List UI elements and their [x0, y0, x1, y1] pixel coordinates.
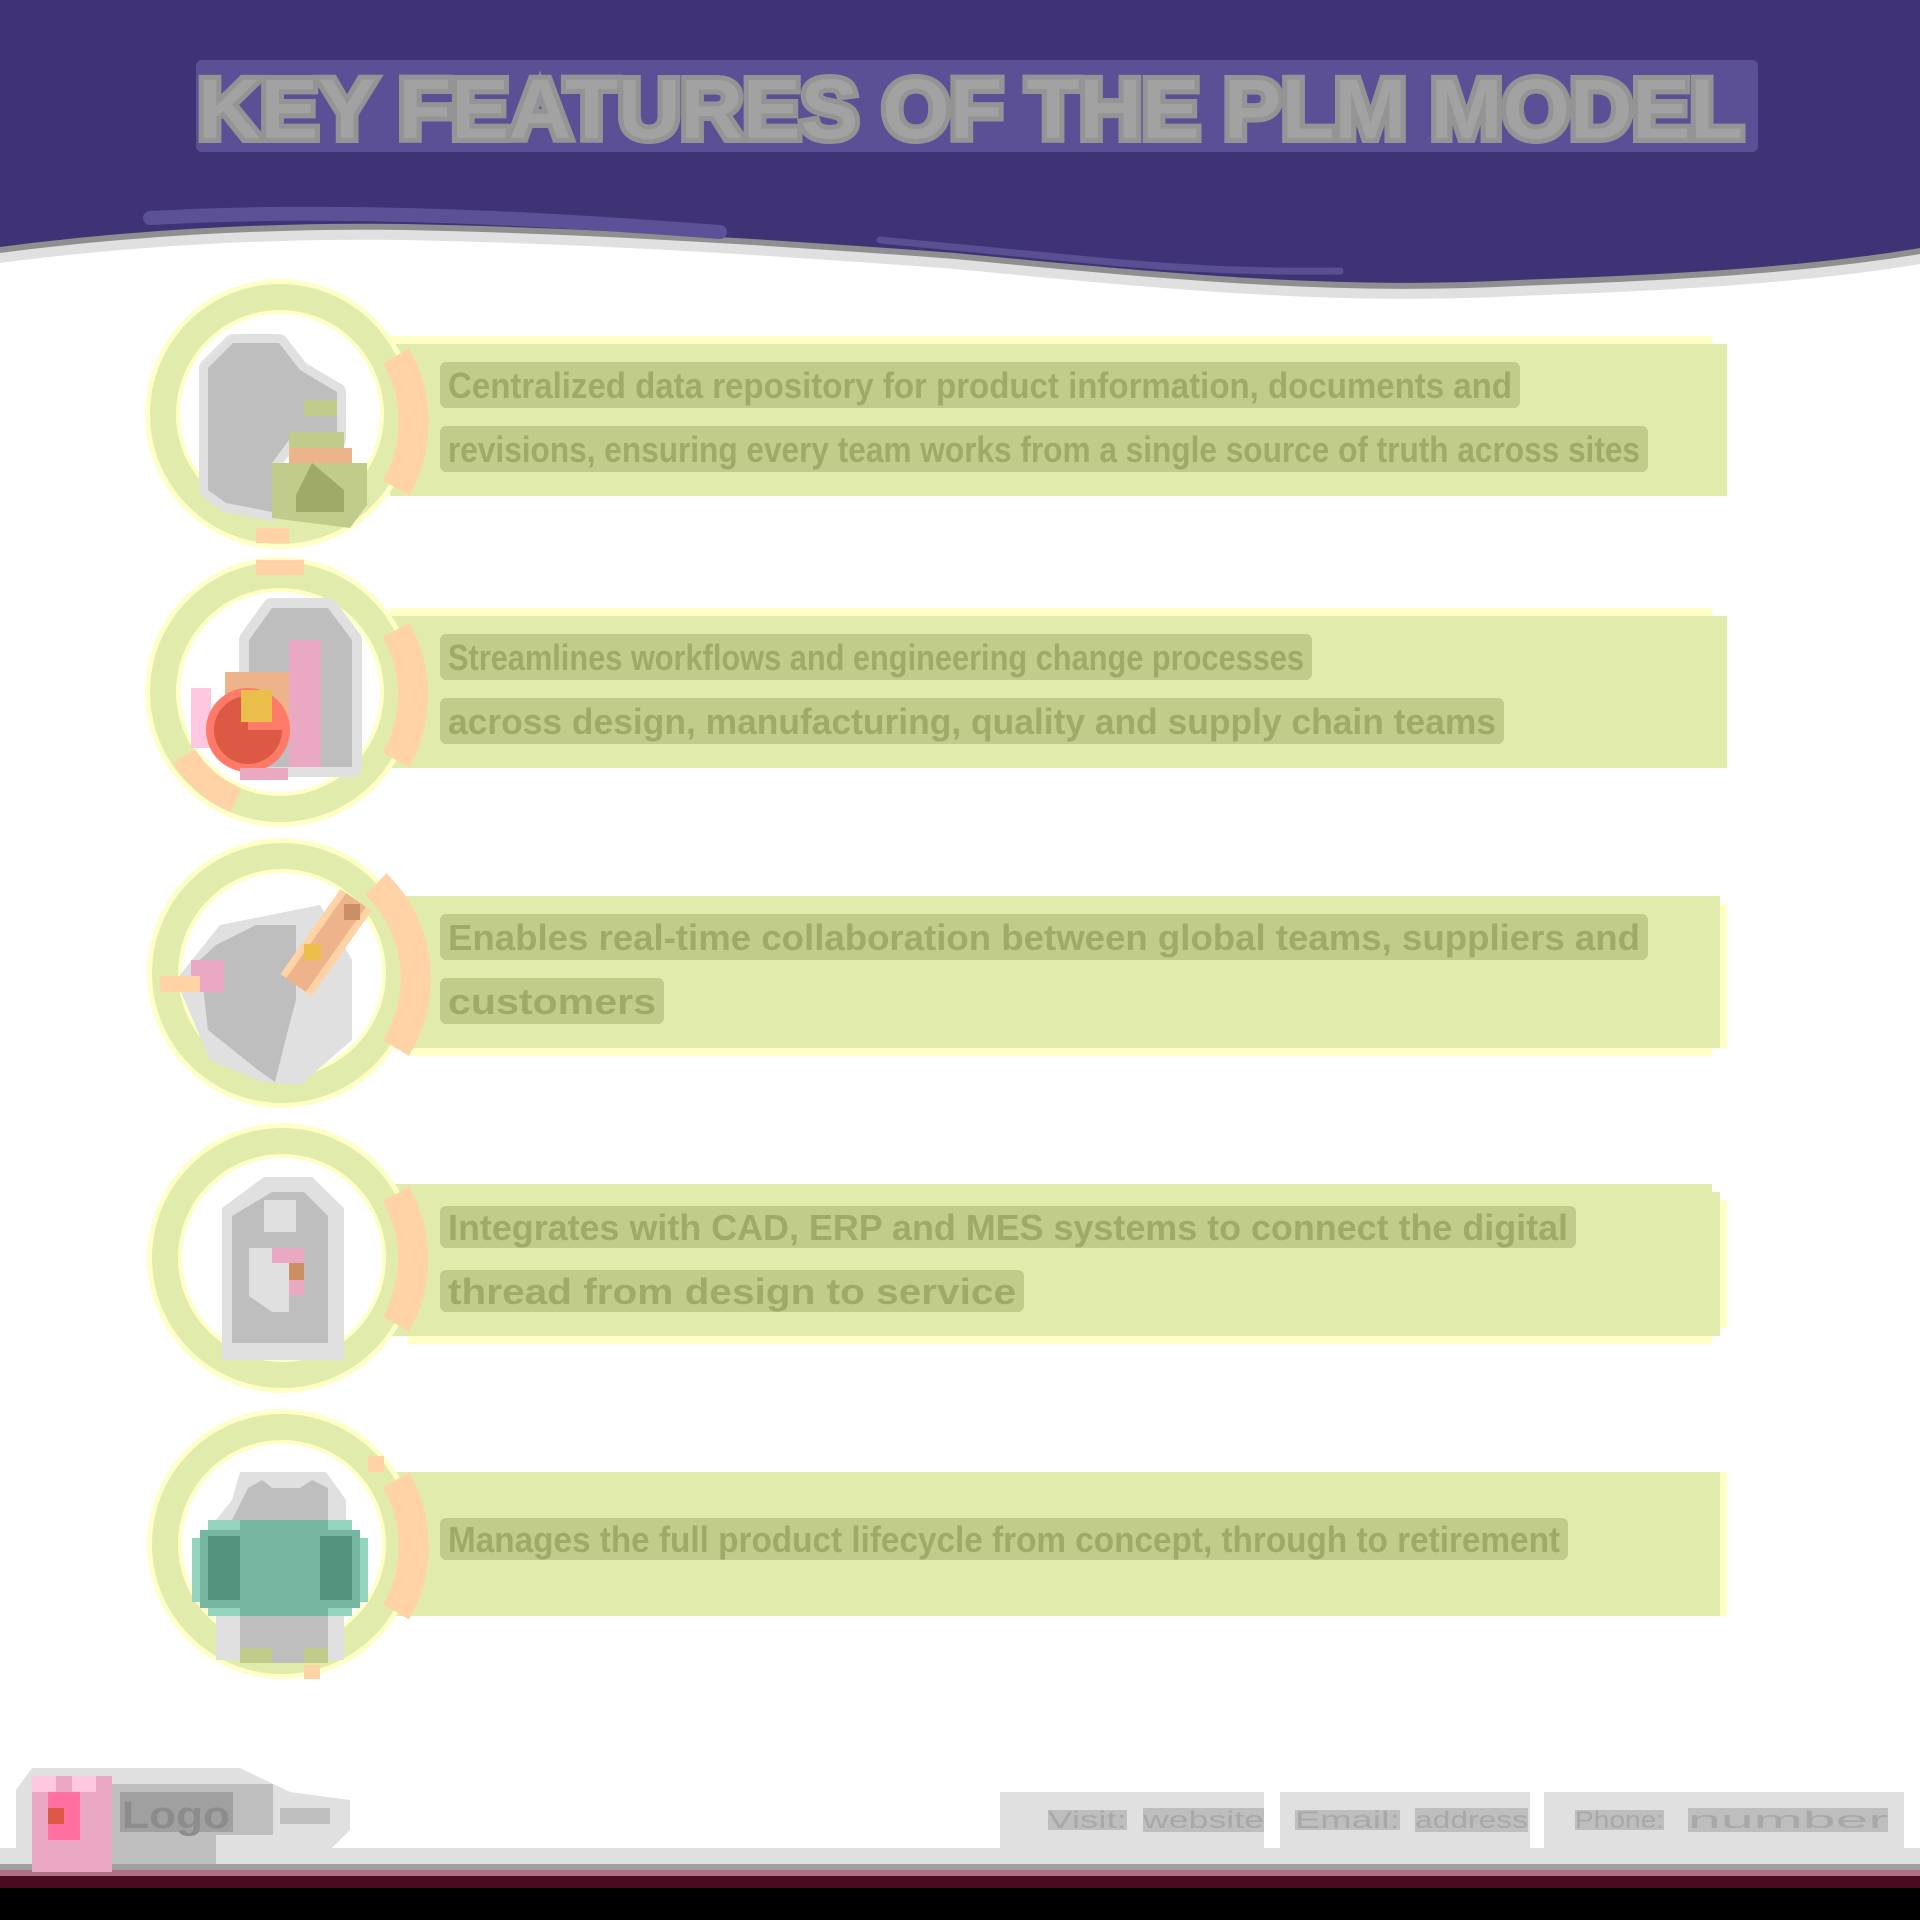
panel: feature 1: [145, 279, 1727, 549]
footer logo: Logo: [122, 1795, 230, 1837]
feature 3 bar: [390, 896, 1727, 1056]
feature 1 text: Centralized data repository for product information, documents and: [448, 365, 1512, 406]
icon: tagged document: [222, 1177, 344, 1360]
feature 3 text: [440, 914, 1648, 1024]
feature 4 ring: [147, 1123, 417, 1393]
icon: chip with green band: [192, 1472, 368, 1663]
feature 5 text: Manages the full product lifecycle from concept, through to retirement: [448, 1519, 1560, 1560]
footer logo: [16, 1768, 350, 1872]
footer contact details: [1000, 1792, 1904, 1848]
title: KEY FEATURES OF THE PLM MODEL: [198, 62, 1743, 156]
feature 4 bar: [390, 1184, 1727, 1344]
feature 4 text: thread from design to service: [448, 1271, 1016, 1312]
feature 2 bar: [390, 608, 1727, 768]
feature 5 ring: [147, 1409, 417, 1679]
footer contact details: address: [1415, 1807, 1528, 1834]
feature 3 text: customers: [448, 981, 656, 1022]
feature 1 ring: [145, 279, 415, 549]
icon: document and pencil: [160, 900, 360, 1085]
panel: feature 5: [147, 1409, 1727, 1679]
feature 3 text: Enables real-time collaboration between global teams, suppliers and: [448, 917, 1640, 958]
feature 2 ring: [145, 557, 415, 827]
feature 1 text: [440, 362, 1648, 472]
icon: document with pie chart: [191, 608, 352, 780]
icon: document with tree: [208, 343, 367, 543]
footer contact details: Visit:: [1048, 1807, 1127, 1834]
header banner: [0, 0, 1920, 299]
footer contact details: website: [1142, 1807, 1264, 1834]
panel: feature 4: [147, 1123, 1727, 1393]
footer: [0, 1768, 1920, 1920]
feature 5 bar: [390, 1472, 1727, 1616]
feature 1 text: revisions, ensuring every team works from a single source of truth across sites: [448, 429, 1640, 470]
feature 3 ring: [147, 838, 417, 1108]
footer contact details: Email:: [1295, 1807, 1400, 1834]
feature 4 text: [440, 1206, 1576, 1312]
feature 4 text: Integrates with CAD, ERP and MES systems to connect the digital: [448, 1207, 1568, 1248]
panel: feature 2: [145, 557, 1727, 827]
feature 1 bar: [390, 336, 1727, 496]
feature 2 text: [440, 634, 1504, 744]
feature 2 text: Streamlines workflows and engineering change processes: [448, 637, 1304, 678]
feature 2 text: across design, manufacturing, quality and supply chain teams: [448, 701, 1496, 742]
footer contact details: number: [1688, 1807, 1888, 1834]
panel: feature 3: [147, 838, 1727, 1108]
footer contact details: Phone:: [1575, 1807, 1664, 1834]
